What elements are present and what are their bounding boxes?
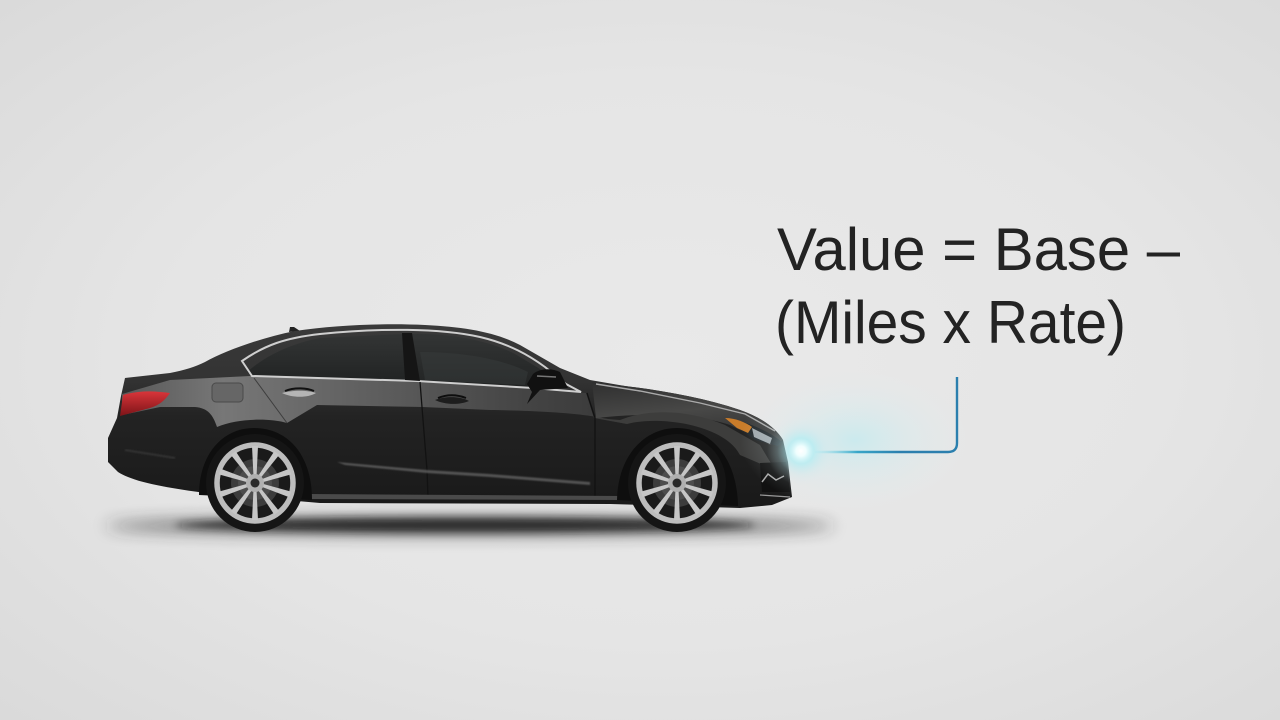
car body [108, 324, 792, 508]
headlight glow [740, 370, 970, 510]
side sill [310, 494, 620, 500]
ground shadow [105, 517, 835, 535]
front glass [412, 334, 545, 387]
shoulder highlight band [122, 376, 627, 427]
formula line 1: Value = Base – [777, 216, 1181, 283]
hood [592, 382, 783, 445]
rear wheel [206, 434, 304, 532]
front wheel [628, 434, 726, 532]
pillar [402, 333, 420, 381]
formula text [775, 216, 1181, 356]
fender highlight [596, 412, 775, 470]
window chrome trim [242, 330, 581, 392]
wheel arches [199, 428, 738, 506]
tail light [120, 391, 170, 416]
door handles [282, 388, 469, 404]
antenna [289, 327, 300, 332]
car [108, 324, 792, 532]
fuel door [212, 383, 243, 402]
headlight [725, 418, 782, 446]
rear quarter seam [254, 378, 287, 423]
formula line 2: (Miles x Rate) [775, 289, 1126, 356]
body side crease [337, 462, 590, 485]
window reflection [420, 352, 528, 385]
connector line [815, 377, 957, 452]
rear glass [247, 334, 405, 380]
door seams [420, 382, 595, 497]
hood crease [596, 384, 775, 431]
fog light [760, 462, 790, 497]
side mirror [527, 369, 568, 404]
